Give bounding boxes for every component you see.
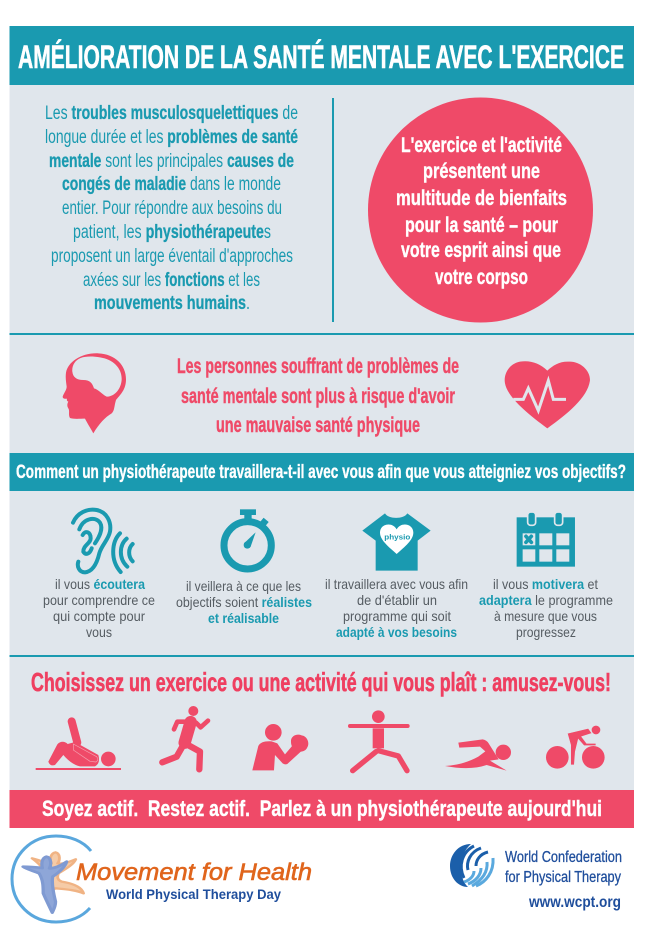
icon: cyclist — [546, 726, 605, 769]
intro text block: entier. Pour répondre aux besoins du — [62, 198, 282, 219]
intro text block: proposent un large éventail d'approches — [51, 246, 293, 267]
callout text: présentent une — [423, 160, 540, 183]
icon: stopwatch — [224, 509, 271, 569]
title banner — [10, 26, 634, 85]
logo tagline: World Physical Therapy Day — [106, 886, 281, 902]
intro text block: patient, les physiothérapeutes — [73, 222, 271, 243]
icon: heart with pulse — [505, 361, 590, 428]
vertical divider — [332, 98, 334, 322]
logo figures — [23, 852, 84, 913]
caption: listen — [43, 576, 155, 640]
callout text: votre corpso — [435, 266, 528, 289]
caption: programme — [325, 576, 468, 640]
caption: programme: il travaillera avec vous afin — [325, 576, 468, 592]
caption: programme: adapté à vos besoins — [336, 624, 457, 640]
caption: motivate — [479, 576, 613, 640]
intro text block: mouvements humains. — [94, 293, 250, 314]
globe mark — [450, 844, 493, 887]
icon: sit-up — [36, 721, 121, 769]
logo: WCPT — [450, 844, 622, 911]
caption: goals: il veillera à ce que les — [186, 578, 301, 594]
intro text block: Les troubles musculosquelettiques de — [45, 103, 298, 124]
icon: medicine ball — [252, 724, 308, 770]
intro text block: longue durée et les problèmes de santé — [45, 127, 298, 148]
question banner — [10, 453, 634, 491]
icon: physio t-shirt: physio — [384, 533, 411, 542]
callout circle — [368, 98, 593, 322]
intro text block: congés de maladie dans le monde — [62, 174, 281, 195]
icon: calendar — [517, 512, 575, 567]
icon: head with brain — [63, 353, 126, 433]
icon: swimmer — [445, 739, 511, 771]
callout text: L'exercice et l'activité — [401, 134, 562, 157]
icon: warrior yoga pose — [350, 710, 408, 771]
logo wordmark: Movement for Health — [76, 859, 312, 886]
caption: listen: qui compte pour — [53, 608, 145, 624]
logo: Movement for Health — [12, 836, 312, 922]
risk statement: une mauvaise santé physique — [216, 414, 420, 437]
callout text: pour la santé – pour — [405, 214, 558, 237]
website: www.wcpt.org — [528, 894, 621, 911]
caption: goals: et réalisable — [208, 610, 279, 626]
risk statement — [177, 355, 459, 437]
intro text block: axées sur les fonctions et les — [83, 270, 260, 291]
caption: listen: il vous écoutera — [55, 576, 145, 592]
icon: ear with sound waves — [73, 510, 133, 572]
callout text: multitude de bienfaits — [396, 187, 567, 210]
call to action banner — [10, 790, 634, 828]
caption: motivate: à mesure que vous — [494, 608, 597, 624]
caption: goals: objectifs soient réalistes — [176, 594, 312, 610]
icon: runner — [162, 706, 208, 769]
caption: listen: pour comprendre ce — [43, 592, 155, 608]
caption: programme: de d'établir un — [357, 592, 437, 608]
caption: motivate: adaptera le programme — [479, 592, 613, 608]
logo ring — [12, 836, 91, 922]
caption: goals — [176, 578, 312, 626]
caption: motivate: il vous motivera et — [493, 576, 598, 592]
callout text — [396, 134, 567, 289]
caption: listen: vous — [86, 624, 112, 640]
callout text: votre esprit ainsi que — [401, 239, 561, 262]
caption: motivate: progressez — [516, 624, 576, 640]
intro text block — [45, 103, 298, 314]
caption: programme: programme qui soit — [343, 608, 451, 624]
icon: physio t-shirt — [362, 513, 431, 571]
intro text block: mentale sont les principales causes de — [49, 151, 294, 172]
risk statement: Les personnes souffrant de problèmes de — [177, 355, 459, 378]
risk statement: santé mentale sont plus à risque d'avoir — [181, 385, 455, 408]
